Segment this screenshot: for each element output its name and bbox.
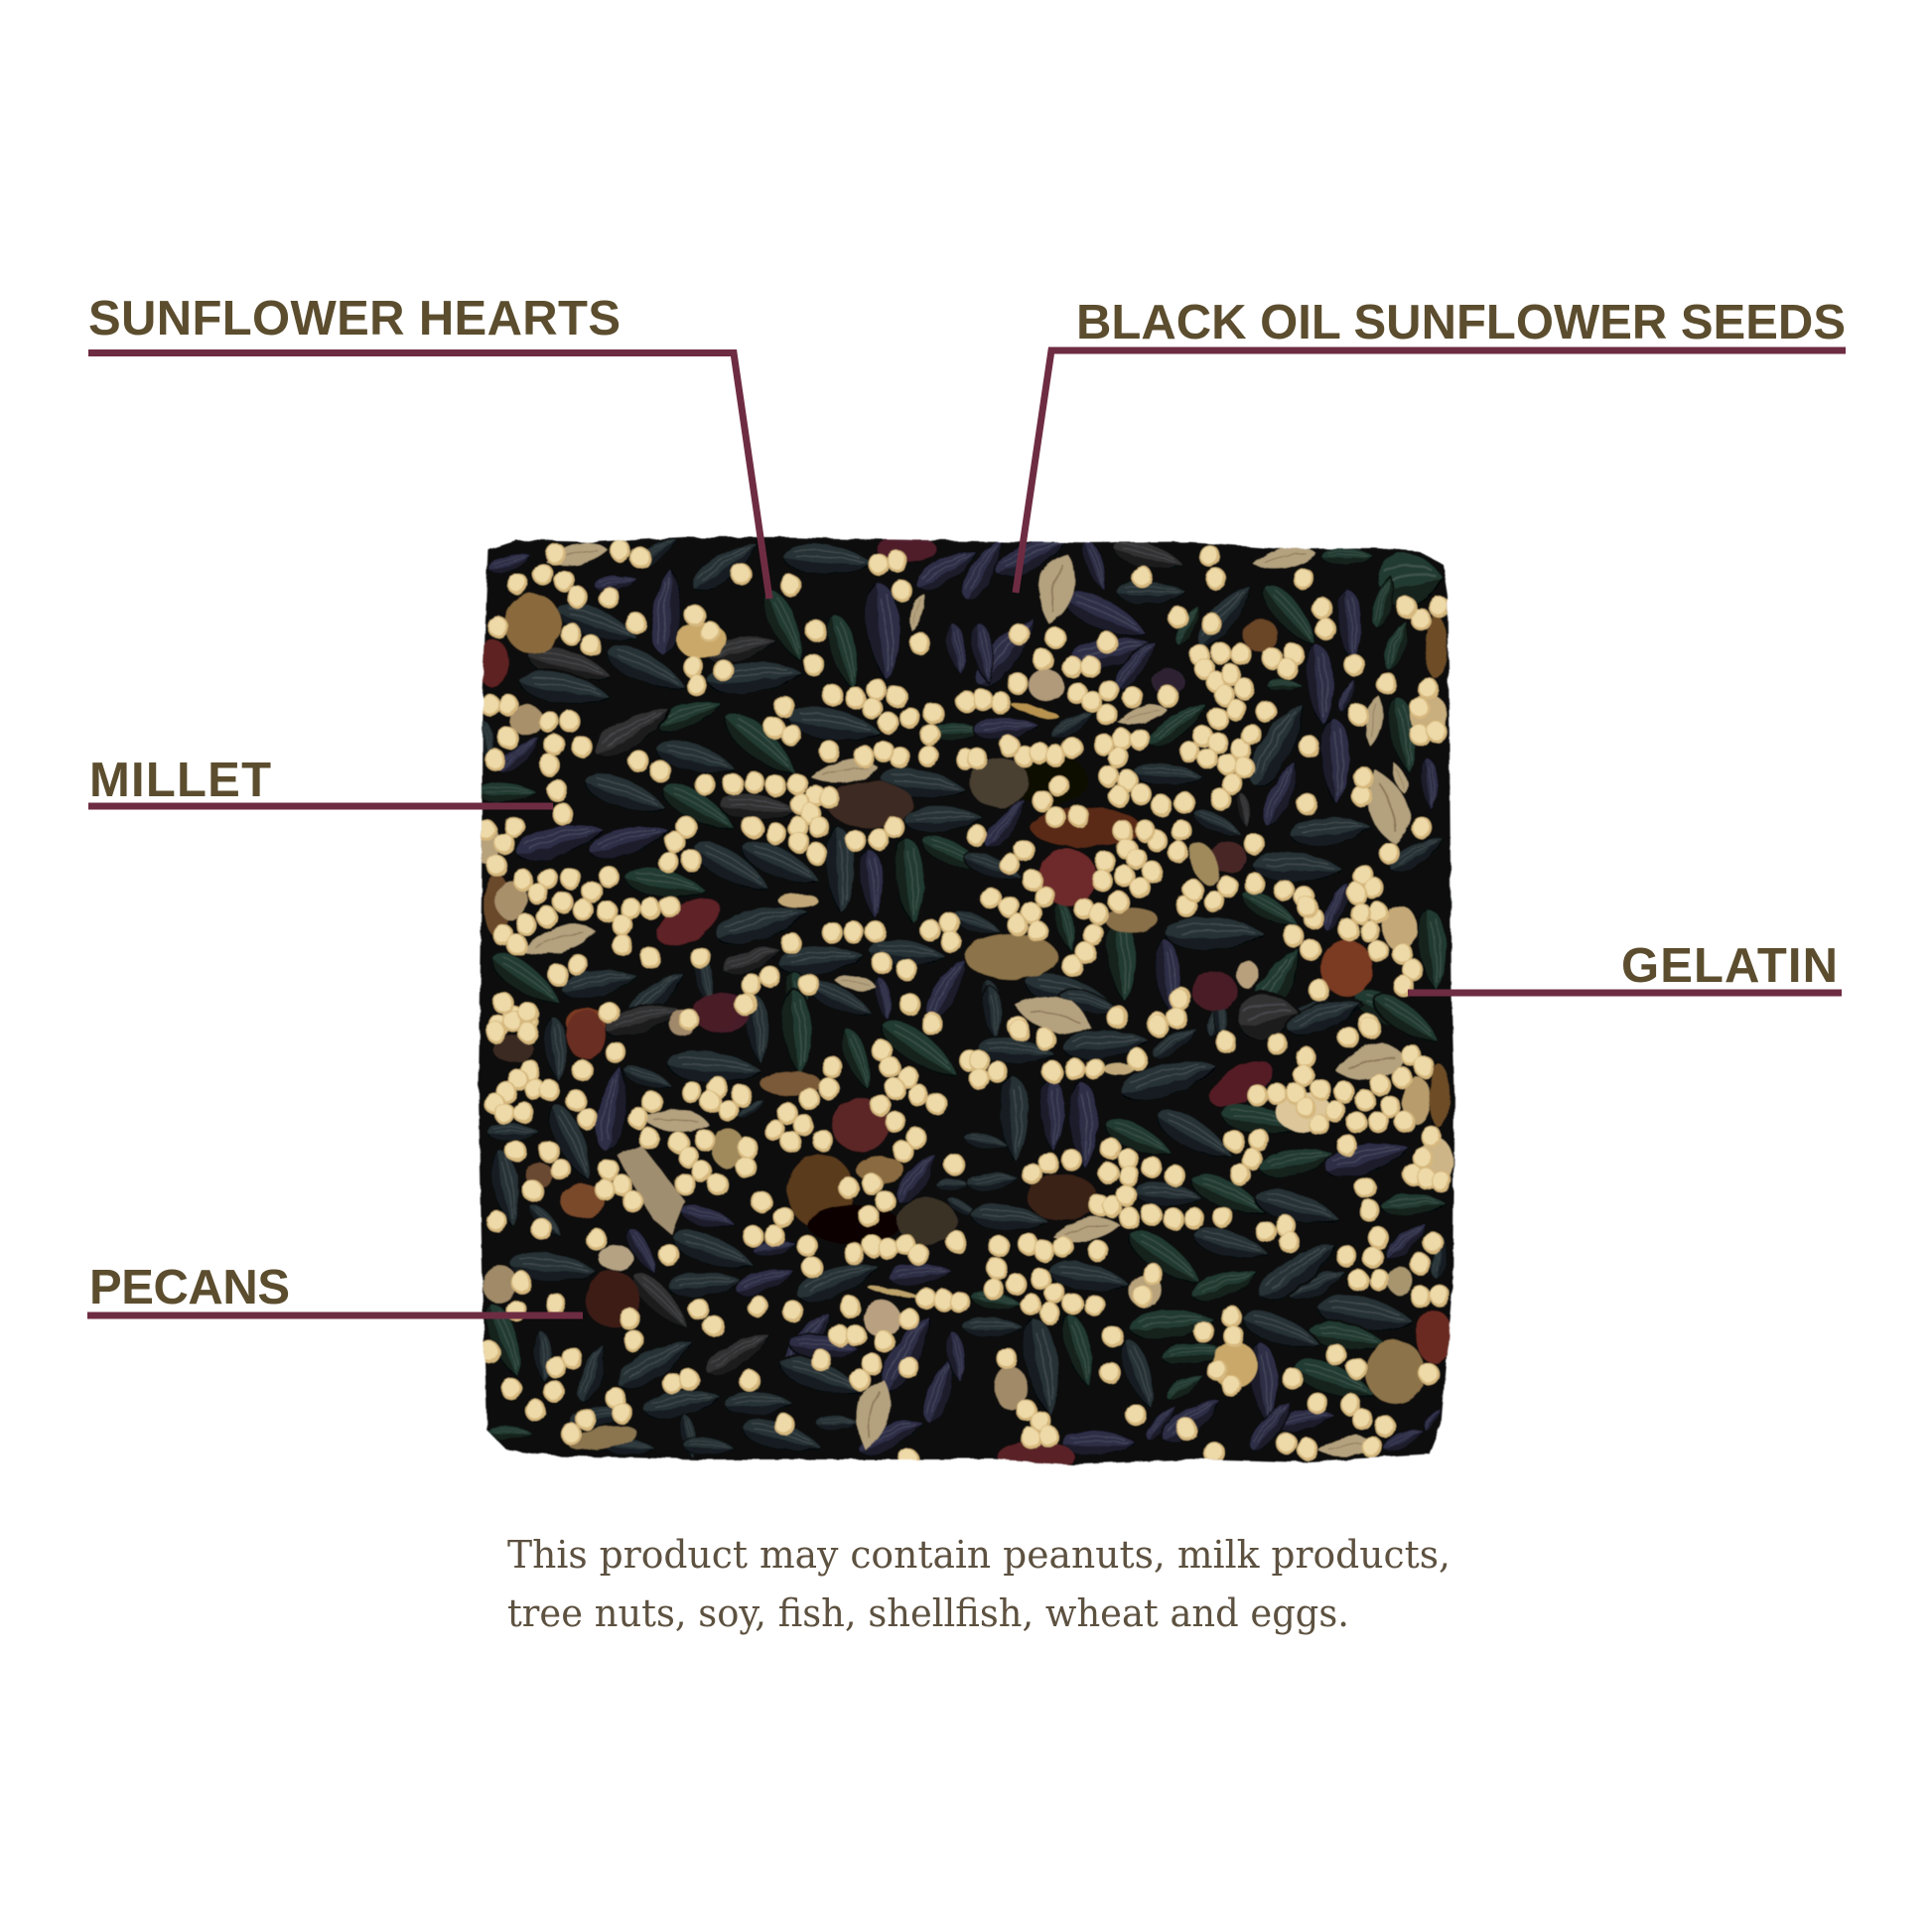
label: sunflower hearts: SUNFLOWER HEARTS [88,292,621,345]
black oil sunflower seeds [476,526,1451,1462]
label: pecans: PECANS [89,1261,290,1314]
allergen note [507,1533,1450,1635]
allergen note: tree nuts, soy, fish, shellfish, wheat and eggs. [507,1591,1349,1635]
pecans and fruit pieces [474,536,1452,1471]
label: millet: MILLET [89,754,271,807]
allergen note: This product may contain peanuts, milk products, [507,1533,1450,1577]
sunflower hearts [518,538,1417,1458]
label: gelatin: GELATIN [1621,939,1838,993]
block base [477,536,1459,1469]
label: black oil sunflower seeds [1016,296,1846,593]
label: sunflower hearts [88,292,769,599]
label: black oil sunflower seeds: BLACK OIL SUNFLOWER SEEDS [1076,296,1846,349]
millet grains [477,540,1451,1470]
product photo: seed block [474,526,1459,1471]
